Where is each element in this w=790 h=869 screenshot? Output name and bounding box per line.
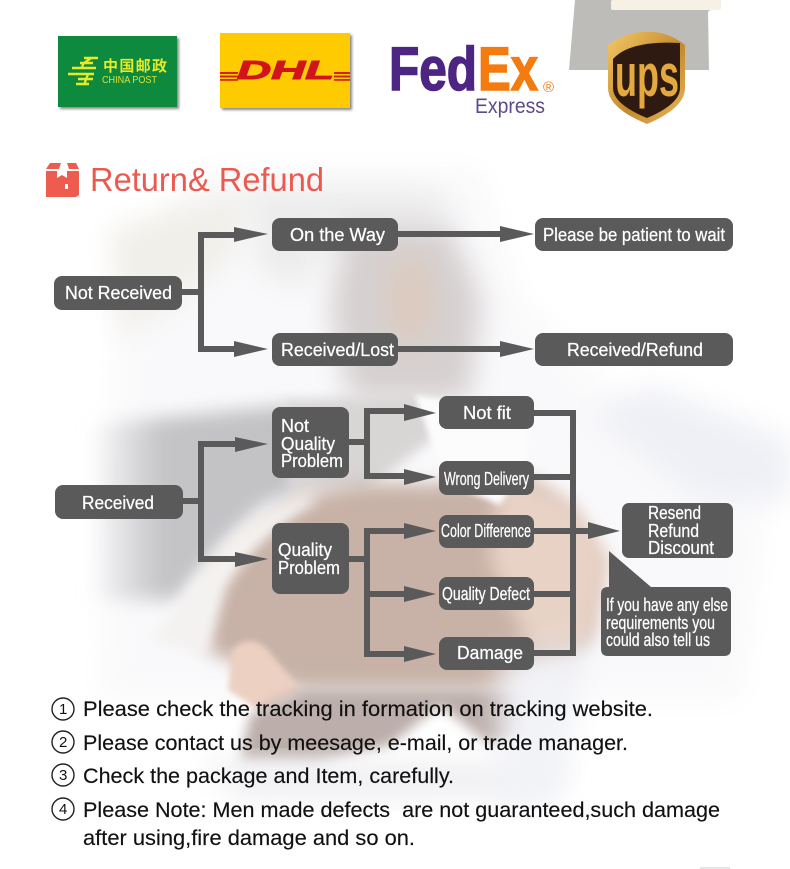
- logo: DHL: DHL: [237, 55, 334, 85]
- box: Color Difference: [439, 515, 534, 548]
- note 2: Please contact us by meesage, e-mail, or trade manager.: [83, 732, 628, 755]
- logo: China Post: CHINA POST: [102, 75, 157, 86]
- logo: DHL: [220, 33, 350, 108]
- logo: FedEx Express: Ex: [478, 35, 538, 103]
- note 1: 1: [59, 701, 67, 718]
- callout: other requirements: [601, 551, 731, 656]
- logo: FedEx Express: ®: [543, 79, 554, 96]
- icon: China Post emblem: [68, 58, 98, 85]
- box: On the Way: [272, 218, 398, 251]
- box: Not Quality Problem: Quality: [281, 434, 335, 454]
- box: Quality Problem: Quality: [278, 540, 332, 560]
- box: Received: Received: [82, 493, 154, 513]
- heading: Return & Refund: Return& Refund: [90, 161, 324, 198]
- note 4: 4: [59, 801, 67, 818]
- callout: other requirements: requirements you: [606, 613, 715, 633]
- box: Received: [55, 485, 183, 519]
- box: Quality Defect: [439, 577, 534, 610]
- note 4: [52, 798, 720, 850]
- note 2: 2: [59, 734, 67, 751]
- note 4: after using,fire damage and so on.: [83, 827, 415, 850]
- notes list: [52, 698, 720, 850]
- box: Resend Refund Discount: Refund: [648, 521, 699, 541]
- note 3: Check the package and Item, carefully.: [83, 765, 454, 788]
- box: Received/Lost: Received/Lost: [281, 340, 394, 360]
- box: Not Quality Problem: Not: [281, 416, 309, 436]
- box: Not Quality Problem: Problem: [281, 451, 343, 471]
- box: Damage: Damage: [457, 643, 523, 663]
- box: Not Quality Problem: [272, 407, 349, 478]
- box: Quality Defect: Quality Defect: [442, 584, 530, 604]
- box: Wrong Delivery: Wrong Delivery: [444, 469, 529, 489]
- box: On the Way: On the Way: [290, 225, 385, 245]
- box: Received/Refund: Received/Refund: [567, 340, 703, 360]
- box: Not Received: [54, 276, 182, 310]
- callout: other requirements: If you have any else: [606, 595, 728, 615]
- note 4: Please Note: Men made defects are not guaranteed,such damage: [83, 799, 720, 822]
- box: Received/Lost: [272, 333, 398, 366]
- logo: FedEx Express: [389, 35, 554, 118]
- box: Quality Problem: [272, 523, 349, 594]
- box: Please be patient to wait: [535, 218, 733, 251]
- logo: UPS: ups: [615, 42, 679, 109]
- logo: FedEx Express: Express: [475, 95, 545, 118]
- box: Quality Problem: Problem: [278, 558, 340, 578]
- box: Received/Refund: [535, 333, 733, 366]
- icon: parcel box: [46, 163, 79, 197]
- note 1: Please check the tracking in formation on tracking website.: [83, 698, 653, 721]
- logo: China Post: [58, 36, 177, 107]
- logo: China Post: 中国邮政: [103, 58, 167, 75]
- flowchart: received: [55, 396, 733, 670]
- box: Resend Refund Discount: Discount: [648, 538, 714, 558]
- flowchart: not received: [54, 218, 733, 366]
- box: Wrong Delivery: [439, 461, 534, 495]
- logo: UPS: [569, 0, 721, 124]
- logo: FedEx Express: Fed: [389, 35, 477, 103]
- box: Resend Refund Discount: [622, 503, 733, 558]
- callout: other requirements: could also tell us: [606, 630, 710, 650]
- arrows: [235, 404, 620, 662]
- box: Please be patient to wait: Please be patient to wait: [543, 225, 725, 245]
- box: Not Received: Not Received: [65, 283, 172, 303]
- note 3: 3: [59, 767, 67, 784]
- arrows: [234, 226, 534, 357]
- box: Damage: [439, 637, 534, 670]
- box: Not fit: Not fit: [463, 403, 511, 423]
- box: Resend Refund Discount: Resend: [648, 503, 701, 523]
- box: Not fit: [439, 396, 534, 429]
- box: Color Difference: Color Difference: [441, 521, 531, 541]
